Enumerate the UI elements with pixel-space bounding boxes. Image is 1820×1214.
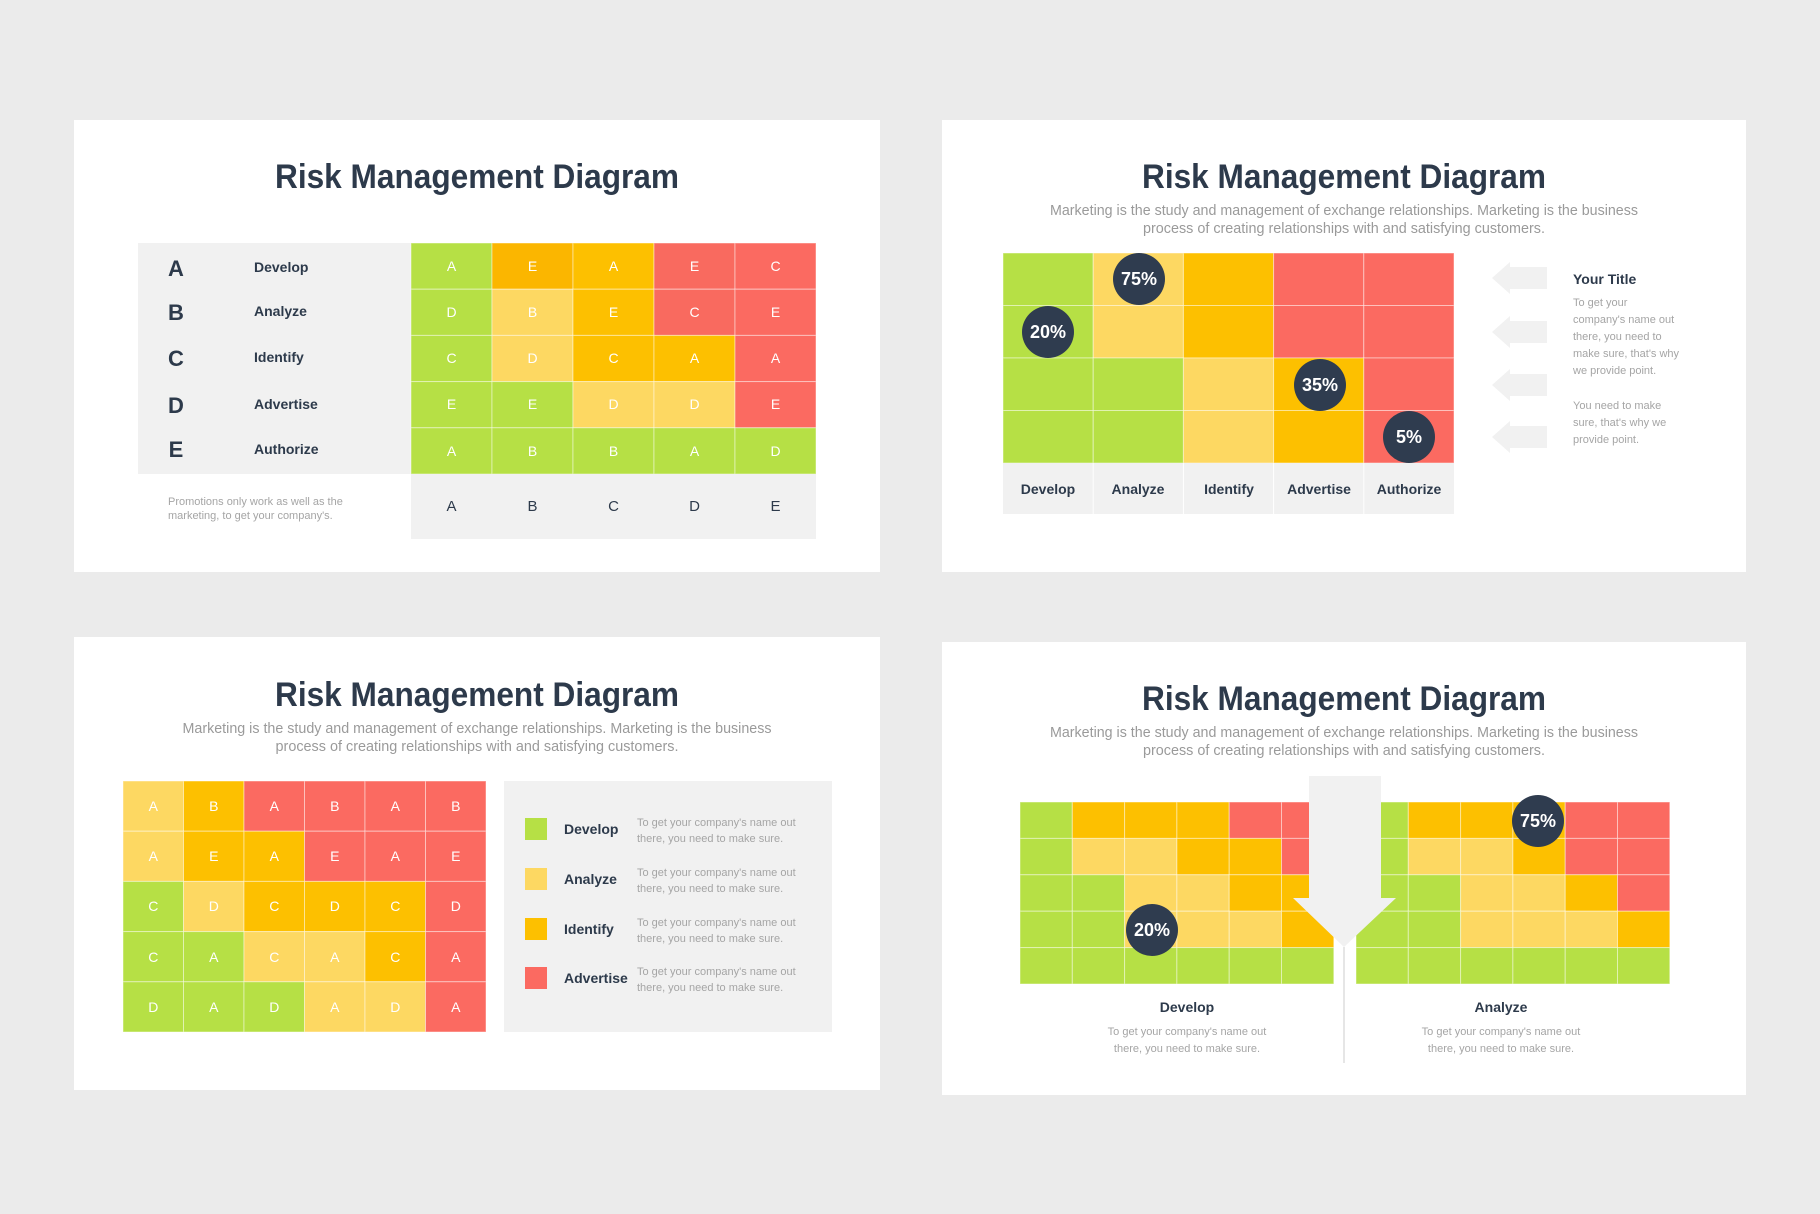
grid letters: B <box>528 304 537 320</box>
grid letters: E <box>771 396 780 412</box>
grid letters: B <box>609 443 618 459</box>
grid letters: A <box>270 798 280 814</box>
side text <box>1572 271 1680 446</box>
subtitle <box>182 720 772 755</box>
grid letters: A <box>690 443 700 459</box>
legend box: there, you need to make sure. <box>637 933 783 945</box>
side text: provide point. <box>1573 434 1639 446</box>
subtitle <box>1050 202 1638 237</box>
badge: 20% <box>1022 306 1074 358</box>
caption: analyze: Analyze <box>1475 999 1528 1015</box>
column axis: A <box>446 498 457 515</box>
row labels box <box>138 243 411 474</box>
grid letters <box>446 258 781 459</box>
row labels box: C <box>168 346 184 371</box>
legend box: Advertise <box>564 970 628 986</box>
side text: there, you need to <box>1573 331 1662 343</box>
grid letters: E <box>528 396 537 412</box>
side text: To get your <box>1573 297 1628 309</box>
subtitle: process of creating relationships with and satisfying customers. <box>1143 220 1545 237</box>
side text: we provide point. <box>1572 365 1656 377</box>
subtitle: process of creating relationships with and satisfying customers. <box>276 738 678 755</box>
caption: develop: To get your company's name out <box>1108 1026 1266 1038</box>
grid letters: E <box>609 304 618 320</box>
grid letters: E <box>209 848 218 864</box>
grid letters: C <box>148 949 158 965</box>
caption: analyze <box>1422 999 1580 1055</box>
grid letters: A <box>330 949 340 965</box>
grid letters: C <box>608 350 619 366</box>
grid letters: C <box>269 949 279 965</box>
grid letters: A <box>447 258 457 274</box>
grid letters: A <box>149 798 159 814</box>
column axis: B <box>527 498 538 515</box>
grid letters: C <box>390 898 400 914</box>
badge: 75%: 75% <box>1121 269 1157 289</box>
grid letters: C <box>148 898 158 914</box>
grid letters: D <box>269 999 279 1015</box>
category labels row <box>1003 463 1454 514</box>
category labels row: Develop <box>1021 481 1075 497</box>
grid letters: D <box>390 999 400 1015</box>
subtitle: Marketing is the study and management of exchange relationships. Marketing is the business <box>182 720 772 737</box>
badge: 20%: 20% <box>1134 920 1170 940</box>
footnote text <box>168 496 343 522</box>
grid letters: C <box>269 898 279 914</box>
badge: 5%: 5% <box>1396 427 1422 447</box>
grid letters: B <box>330 798 339 814</box>
title: Risk Management Diagram <box>1142 158 1546 196</box>
caption: analyze: To get your company's name out <box>1422 1026 1580 1038</box>
grid letters: D <box>689 396 700 412</box>
heat grid <box>411 243 816 474</box>
grid letters: D <box>527 350 538 366</box>
side text: company's name out <box>1573 314 1674 326</box>
subtitle: Marketing is the study and management of exchange relationships. Marketing is the business <box>1050 202 1638 219</box>
grid letters: A <box>690 350 700 366</box>
heat grid <box>1003 253 1454 463</box>
legend box: Analyze <box>564 871 617 887</box>
grid letters: C <box>390 949 400 965</box>
column axis <box>411 474 816 539</box>
grid letters: A <box>209 999 219 1015</box>
row labels box: E <box>169 437 183 462</box>
grid letters: A <box>447 443 457 459</box>
panel: 6x5 matrix with legend <box>74 637 880 1090</box>
grid letters: D <box>209 898 219 914</box>
grid letters: D <box>608 396 619 412</box>
grid letters: E <box>771 304 780 320</box>
grid letters: C <box>689 304 700 320</box>
category labels row: Advertise <box>1287 481 1351 497</box>
panel: percentage heat map <box>942 120 1746 572</box>
grid letters: A <box>149 848 159 864</box>
panel: split matrices with arrow <box>942 642 1746 1095</box>
caption: develop: there, you need to make sure. <box>1114 1043 1260 1055</box>
row labels box: Advertise <box>254 396 318 412</box>
row labels box: B <box>168 300 184 325</box>
arrows pointing left <box>1492 262 1547 453</box>
arrow pointing down <box>1293 776 1396 1063</box>
grid letters: E <box>451 848 460 864</box>
grid letters: A <box>209 949 219 965</box>
row labels box: Analyze <box>254 303 307 319</box>
title: Risk Management Diagram <box>275 676 679 714</box>
legend box: To get your company's name out <box>637 917 796 929</box>
grid letters: D <box>446 304 457 320</box>
badge: 20% <box>1126 904 1178 956</box>
grid letters: A <box>270 848 280 864</box>
grid letters: B <box>528 443 537 459</box>
row labels box: Authorize <box>254 441 319 457</box>
badge: 75%: 75% <box>1520 811 1556 831</box>
badge: 35%: 35% <box>1302 375 1338 395</box>
heat grid <box>123 781 486 1032</box>
left heat grid <box>1020 802 1334 984</box>
footnote text: marketing, to get your company's. <box>168 510 333 522</box>
title: Risk Management Diagram <box>1142 680 1546 718</box>
legend box: To get your company's name out <box>637 966 796 978</box>
badge: 75% <box>1512 795 1564 847</box>
column axis: C <box>608 498 619 515</box>
side text: You need to make <box>1573 400 1661 412</box>
legend box: there, you need to make sure. <box>637 883 783 895</box>
footnote text: Promotions only work as well as the <box>168 496 343 508</box>
subtitle: Marketing is the study and management of exchange relationships. Marketing is the business <box>1050 724 1638 741</box>
grid letters: E <box>528 258 537 274</box>
legend box: To get your company's name out <box>637 867 796 879</box>
grid letters: A <box>391 848 401 864</box>
grid letters: A <box>330 999 340 1015</box>
badge: 75% <box>1113 253 1165 305</box>
title: Risk Management Diagram <box>275 158 679 196</box>
grid letters: D <box>148 999 158 1015</box>
grid letters <box>148 798 461 1015</box>
badge: 5% <box>1383 411 1435 463</box>
caption: analyze: there, you need to make sure. <box>1428 1043 1574 1055</box>
grid letters: E <box>330 848 339 864</box>
column axis: D <box>689 498 700 515</box>
legend box: there, you need to make sure. <box>637 982 783 994</box>
badge: 20%: 20% <box>1030 322 1066 342</box>
subtitle <box>1050 724 1638 759</box>
category labels row: Authorize <box>1377 481 1441 497</box>
side text: Your Title <box>1573 271 1636 287</box>
caption: develop <box>1108 999 1266 1055</box>
grid letters: A <box>451 949 461 965</box>
grid letters: C <box>770 258 781 274</box>
right heat grid <box>1356 802 1670 984</box>
grid letters: A <box>609 258 619 274</box>
grid letters: A <box>771 350 781 366</box>
legend box: Identify <box>564 921 614 937</box>
grid letters: D <box>770 443 781 459</box>
legend box <box>504 781 832 1032</box>
category labels row: Analyze <box>1112 481 1165 497</box>
grid letters: E <box>690 258 699 274</box>
grid letters: B <box>451 798 460 814</box>
badge: 35% <box>1294 359 1346 411</box>
legend box: Develop <box>564 821 618 837</box>
grid letters: A <box>451 999 461 1015</box>
row labels box: Develop <box>254 259 308 275</box>
grid letters: D <box>330 898 340 914</box>
grid letters: E <box>447 396 456 412</box>
grid letters: C <box>446 350 457 366</box>
row labels box: A <box>168 256 184 281</box>
panel: letter matrix <box>74 120 880 572</box>
row labels box: D <box>168 393 184 418</box>
side text: sure, that's why we <box>1573 417 1666 429</box>
grid letters: D <box>451 898 461 914</box>
caption: develop: Develop <box>1160 999 1214 1015</box>
legend box: To get your company's name out <box>637 817 796 829</box>
category labels row: Identify <box>1204 481 1254 497</box>
grid letters: B <box>209 798 218 814</box>
side text: make sure, that's why <box>1573 348 1680 360</box>
grid letters: A <box>391 798 401 814</box>
column axis: E <box>770 498 781 515</box>
legend box: there, you need to make sure. <box>637 833 783 845</box>
subtitle: process of creating relationships with and satisfying customers. <box>1143 742 1545 759</box>
row labels box: Identify <box>254 349 304 365</box>
